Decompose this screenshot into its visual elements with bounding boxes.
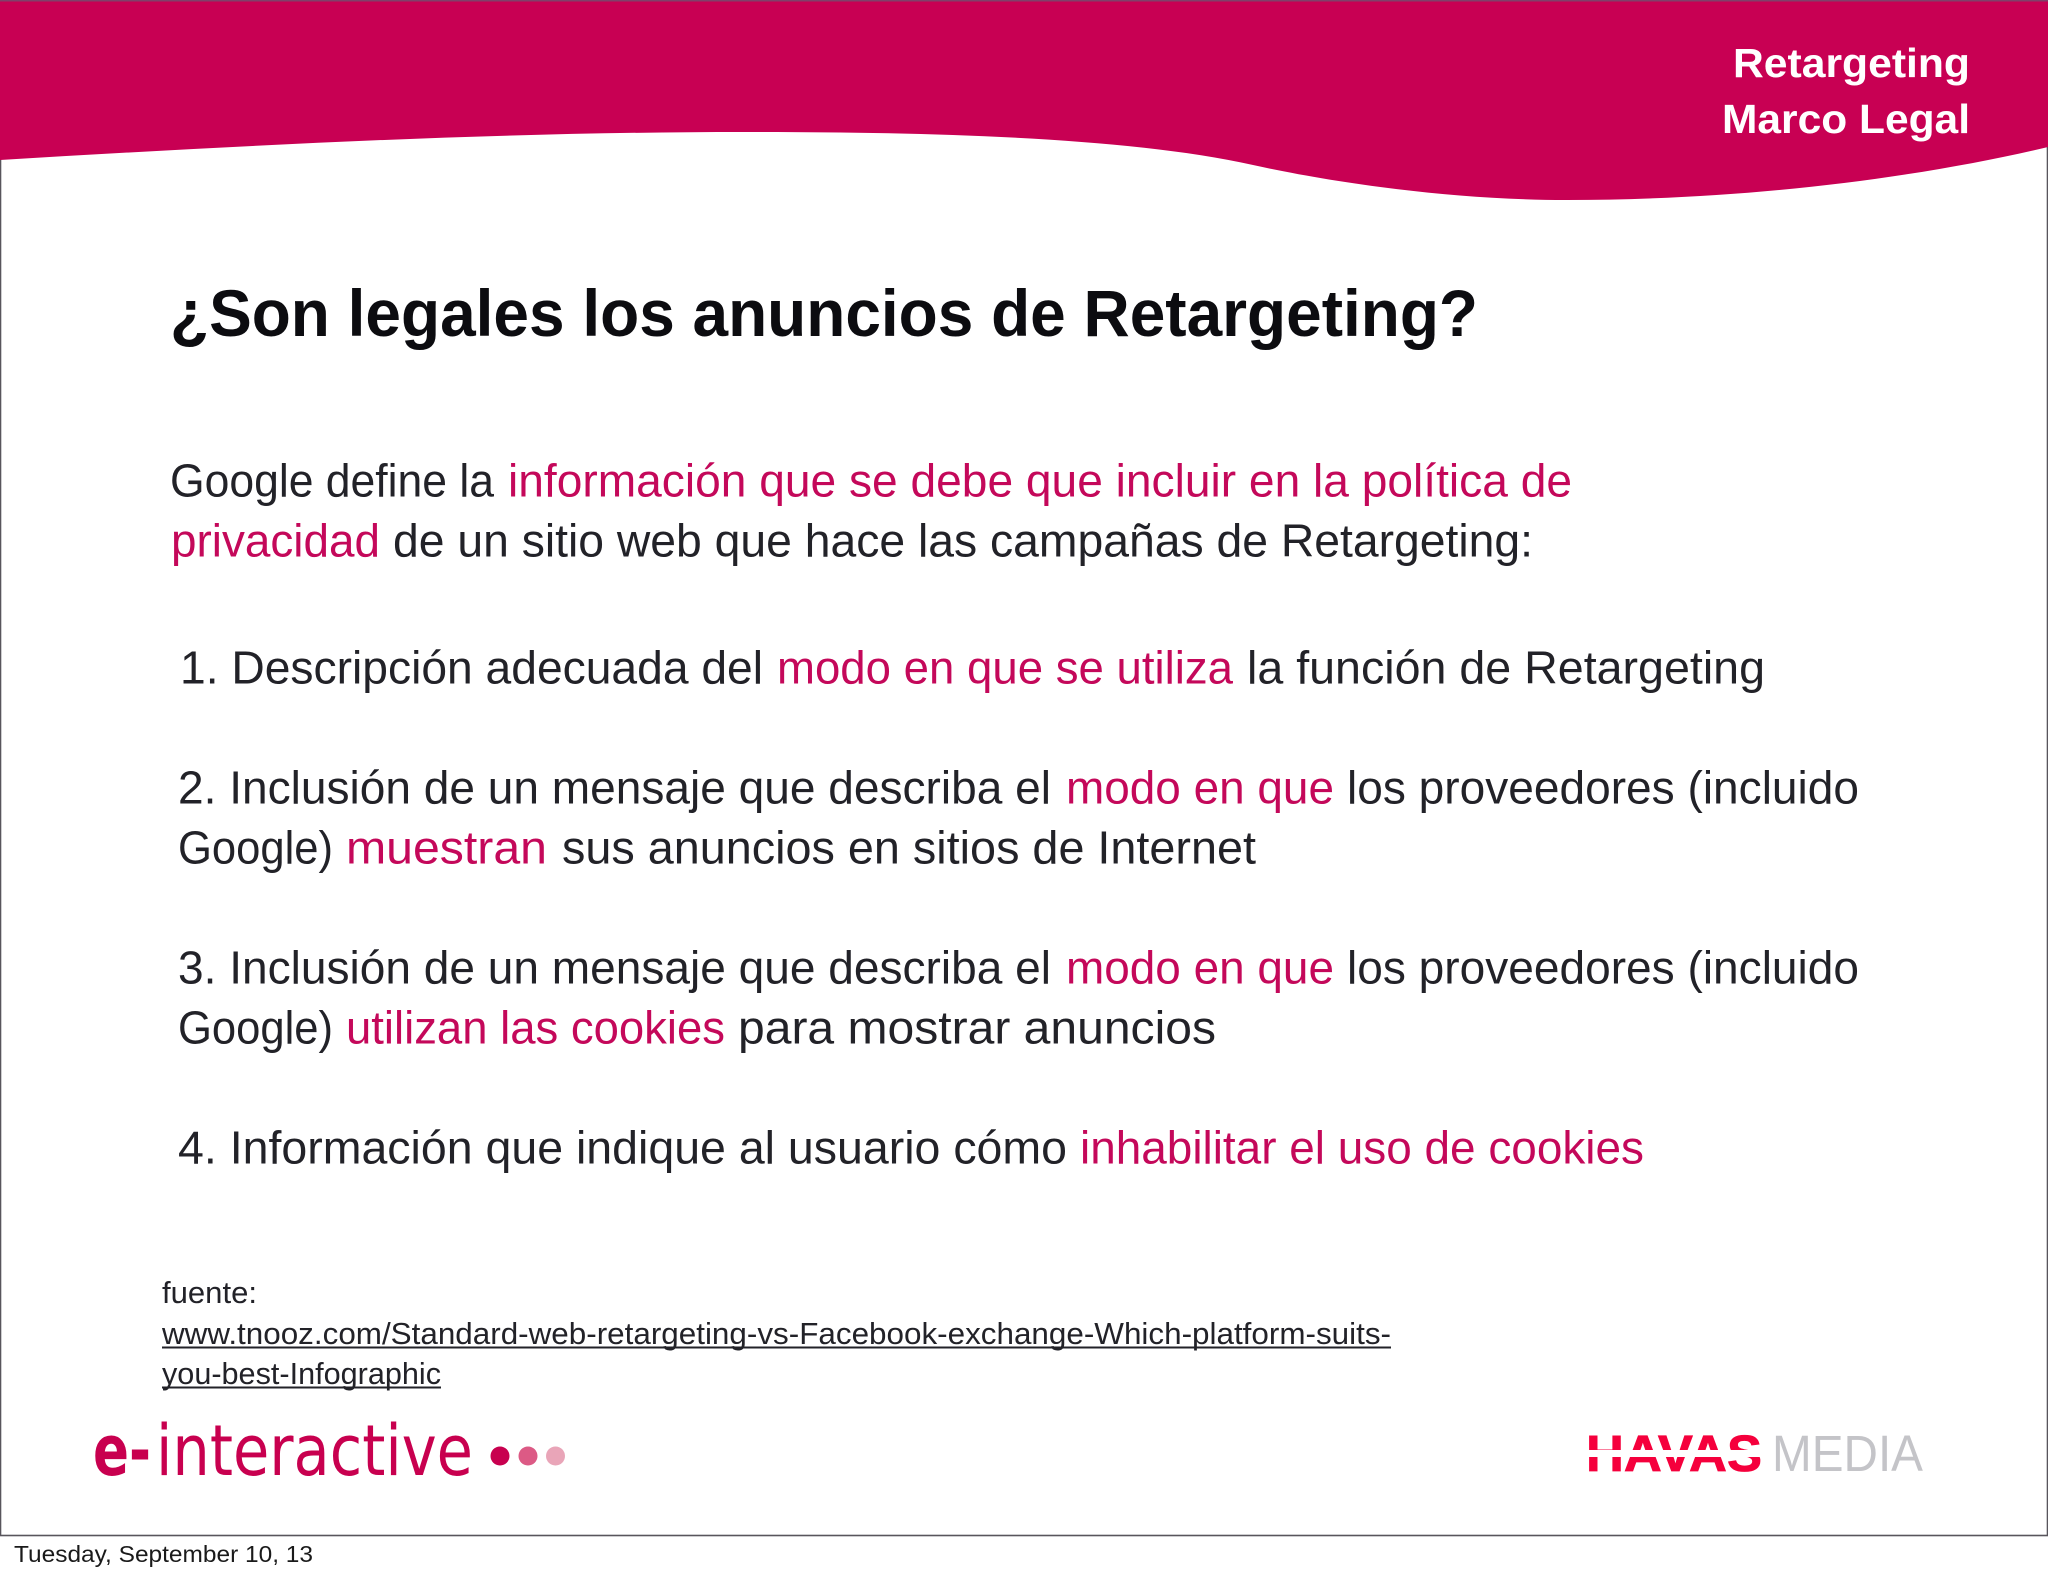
header label (1722, 40, 1970, 142)
list item 2: 2. Inclusión de un mensaje que describa el (178, 762, 1051, 814)
date footer: Tuesday, September 10, 13 (14, 1541, 313, 1567)
header wave band (0, 1, 2048, 200)
list item 3: los proveedores (incluido (1347, 942, 1859, 994)
list item 2 (178, 762, 1859, 874)
source citation: you-best-Infographic (162, 1356, 441, 1391)
intro paragraph: privacidad (171, 514, 380, 566)
list item 3: utilizan las cookies (346, 1002, 725, 1054)
intro paragraph: de un sitio web que hace las campañas de Retargeting: (393, 514, 1533, 566)
header top edge (0, 0, 2048, 2)
logo: Havas Media: MEDIA (1772, 1425, 1923, 1482)
logo: e-interactive: e- (93, 1410, 151, 1492)
list item 3: modo en que (1066, 942, 1334, 994)
intro paragraph: Google define la (170, 454, 494, 506)
intro paragraph: información que se debe que incluir en la política de (508, 454, 1572, 506)
list item 2: modo en que (1066, 762, 1334, 814)
intro paragraph (170, 454, 1572, 566)
logo: e-interactive: interactive (156, 1410, 473, 1492)
logo: Havas Media: HAVAS (1586, 1425, 1762, 1482)
list item 1 (180, 642, 1765, 694)
header label: Marco Legal (1722, 96, 1970, 142)
list item 3: Google) (178, 1002, 333, 1054)
list item 1: 1. Descripción adecuada del (180, 642, 763, 694)
logo: Havas Media (1584, 1425, 1923, 1482)
title: ¿Son legales los anuncios de Retargeting? (170, 276, 1478, 350)
list item 2: los proveedores (incluido (1347, 762, 1859, 814)
list item 4: inhabilitar el uso de cookies (1080, 1122, 1644, 1174)
source citation: fuente: (162, 1275, 257, 1310)
list item 4: 4. Información que indique al usuario cómo (178, 1122, 1067, 1174)
list item 1: modo en que se utiliza (777, 642, 1233, 694)
list item 3: 3. Inclusión de un mensaje que describa el (178, 942, 1051, 994)
list item 2: Google) (178, 822, 333, 874)
list item 3: para mostrar anuncios (738, 1002, 1216, 1054)
list item 1: la función de Retargeting (1247, 642, 1765, 694)
source citation (161, 1275, 1391, 1391)
list item 3 (178, 942, 1859, 1054)
list item 2: sus anuncios en sitios de Internet (562, 822, 1256, 874)
header label: Retargeting (1733, 40, 1970, 86)
list item 2: muestran (346, 822, 547, 874)
list item 4 (178, 1122, 1644, 1174)
source citation: www.tnooz.com/Standard-web-retargeting-vs-Facebook-exchange-Which-platform-suits- (161, 1316, 1391, 1351)
